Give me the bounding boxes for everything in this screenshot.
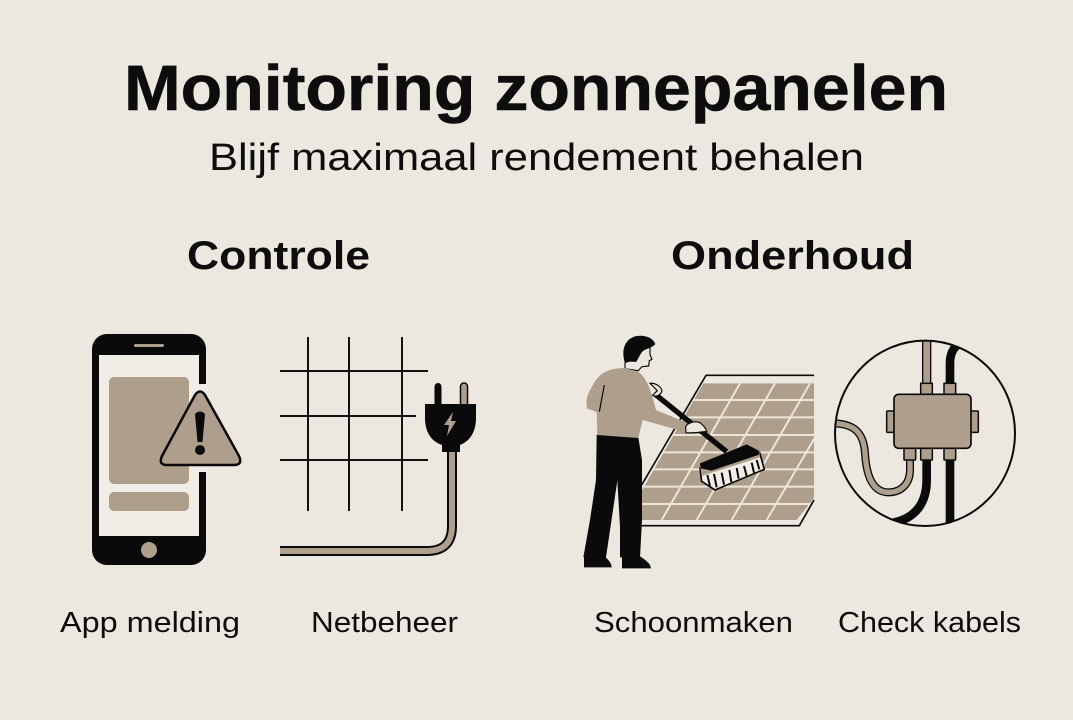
cables (832, 337, 960, 530)
label: Netbeheer: Netbeheer (311, 607, 458, 639)
label: Schoonmaken: Schoonmaken (594, 607, 793, 639)
face (625, 343, 652, 371)
label: App melding: App melding (60, 607, 240, 639)
heading: Onderhoud: Onderhoud (671, 234, 914, 278)
right shoe (622, 557, 651, 568)
brush (700, 444, 764, 490)
phone home button (141, 542, 157, 558)
exclamation dot (195, 445, 205, 455)
title: Monitoring zonnepanelen (124, 52, 948, 124)
solar panel (642, 374, 815, 526)
tan top cable fill (923, 342, 930, 383)
plug bolt (444, 412, 456, 436)
subtitle: Blijf maximaal rendement behalen (209, 137, 864, 179)
bristles (700, 452, 764, 490)
phone screen (99, 355, 199, 536)
arm line (599, 385, 604, 412)
icon: cable junction box in circle (832, 337, 1015, 530)
black curved cable (893, 458, 927, 523)
icon: phone with warning (92, 334, 240, 565)
person (583, 336, 687, 568)
icon: person cleaning solar panel (583, 336, 815, 568)
phone speaker (134, 344, 164, 347)
heading: Controle: Controle (187, 234, 370, 278)
infographic canvas (60, 63, 1020, 638)
screen block small (109, 492, 189, 511)
black top cable (950, 343, 960, 385)
trousers (583, 435, 642, 557)
tan loop cable outline (832, 423, 910, 492)
connector ports (887, 383, 978, 460)
circle outline (835, 341, 1015, 526)
grid lines (280, 337, 428, 511)
shirt (586, 368, 687, 438)
panel cells (625, 383, 814, 520)
left shoe (584, 555, 612, 567)
lower hand (686, 422, 707, 433)
junction box (894, 394, 971, 448)
label: Check kabels: Check kabels (838, 607, 1021, 639)
tan loop cable fill (832, 423, 910, 492)
icon: power grid with plug (280, 337, 476, 551)
tan top cable (922, 342, 932, 383)
phone edge cutout (198, 384, 208, 472)
phone body (92, 334, 206, 565)
plug body (425, 404, 476, 452)
upper hand (650, 383, 662, 396)
hair (623, 336, 655, 363)
panel outline (638, 375, 814, 526)
brush head (700, 444, 759, 471)
brush tan stripe (700, 449, 760, 476)
plug prong tan (460, 383, 468, 407)
cable fill (280, 450, 452, 551)
bristle lines (707, 460, 759, 487)
black right cable (946, 460, 954, 522)
warning triangle (161, 392, 240, 465)
screen block large (109, 377, 189, 484)
broom pole (654, 393, 727, 452)
cable outline (280, 450, 452, 551)
exclamation mark (195, 412, 205, 442)
panel grid lines (642, 384, 814, 520)
plug prong black (434, 383, 442, 407)
